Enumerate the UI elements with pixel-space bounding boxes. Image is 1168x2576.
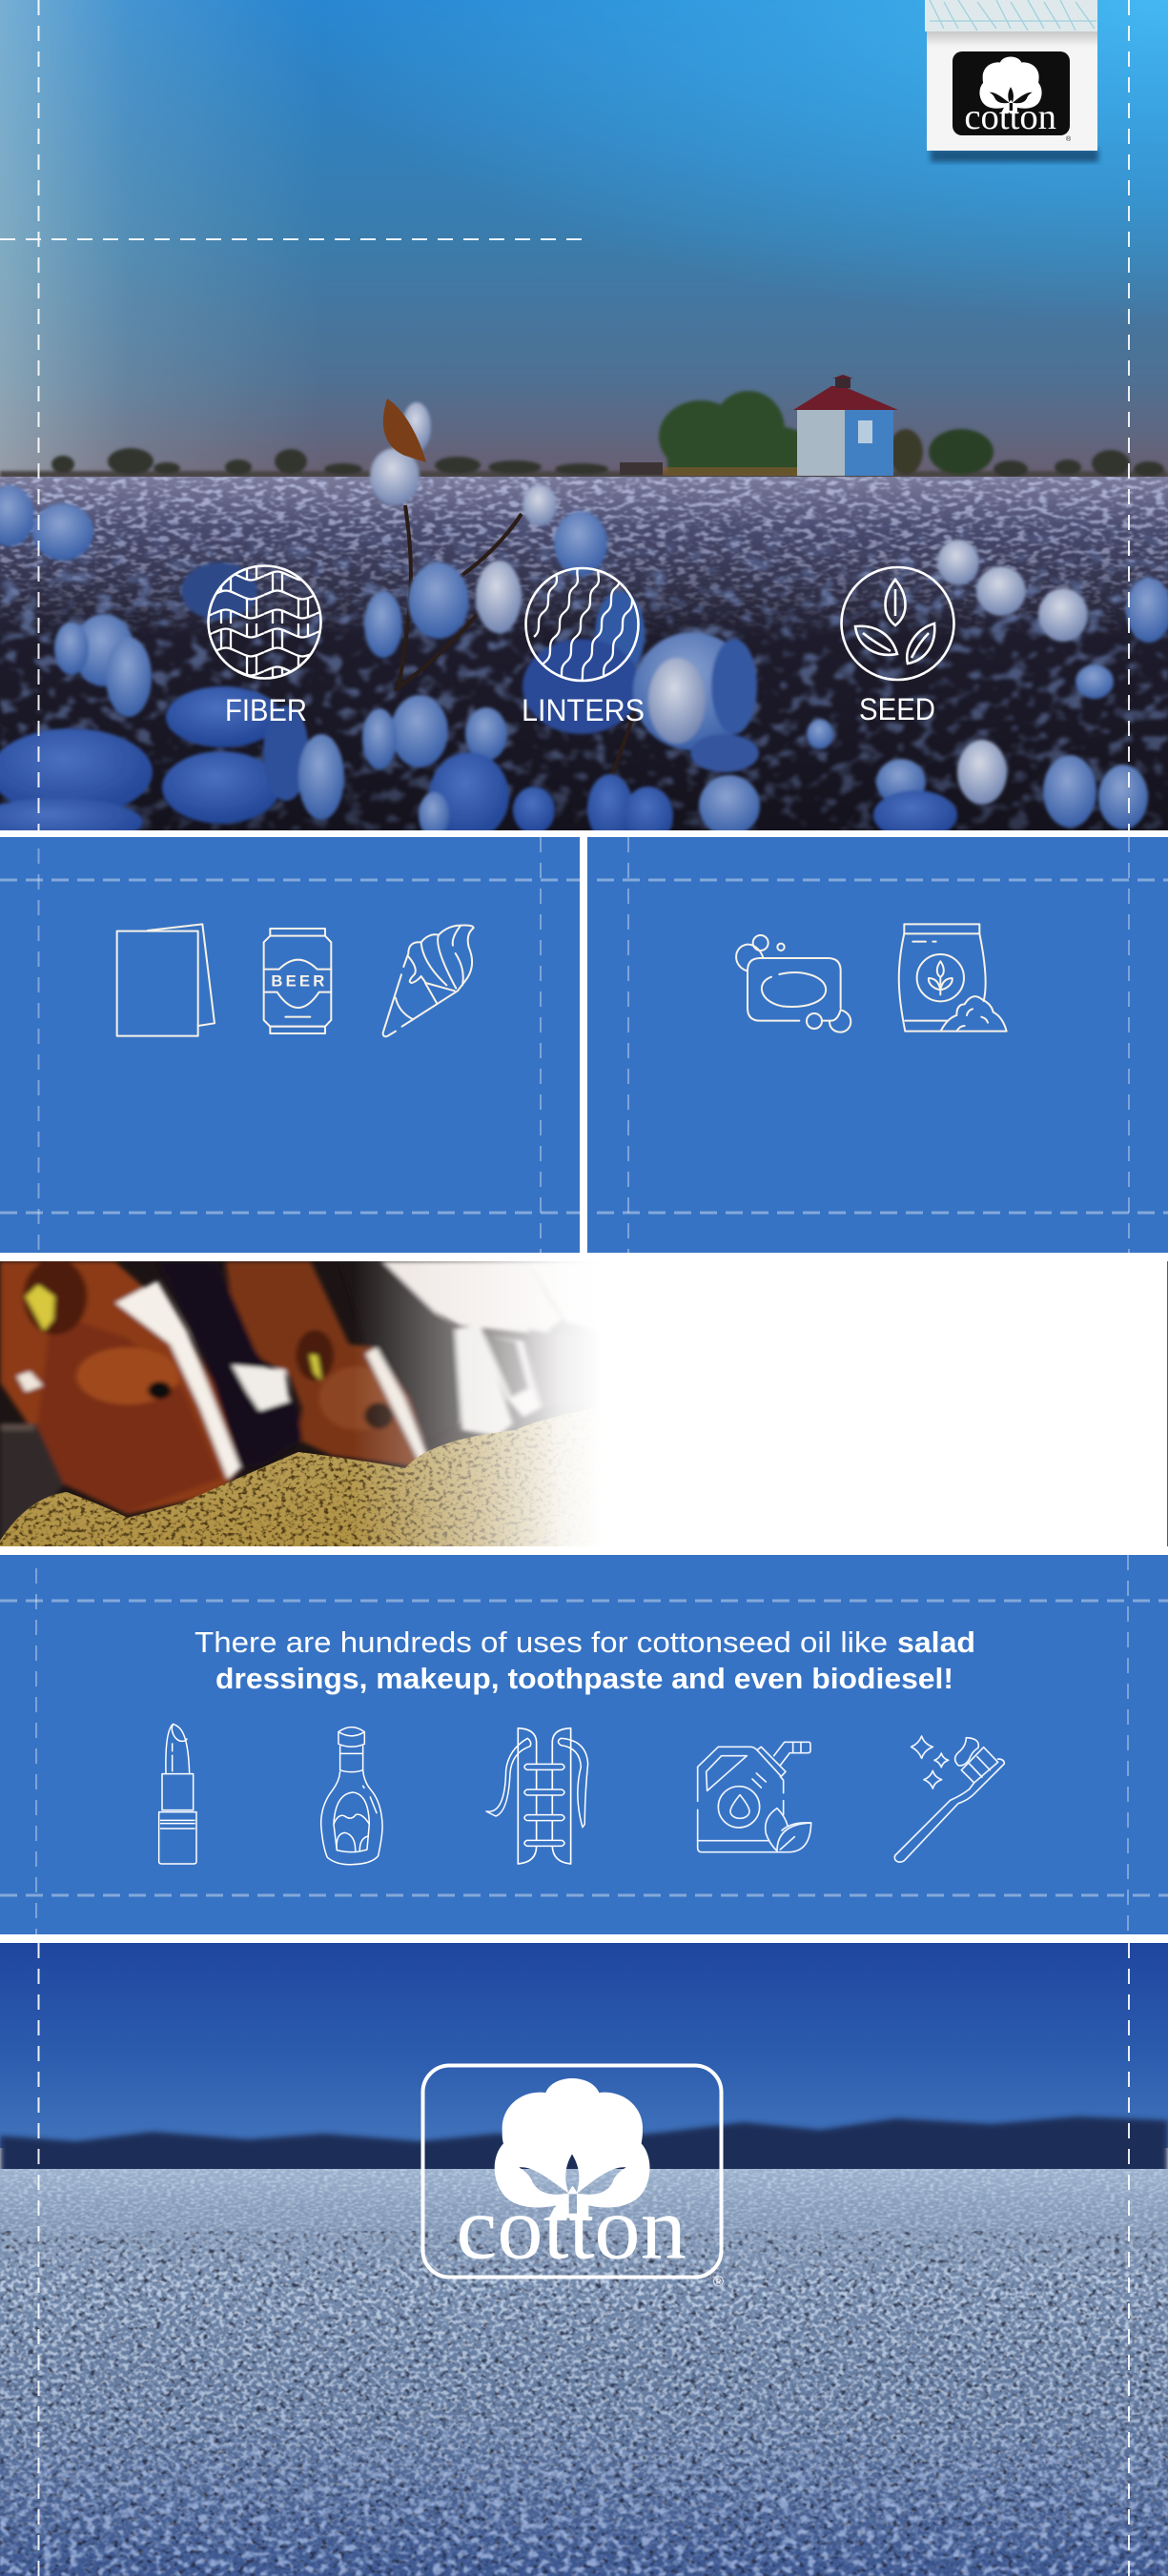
closing field: far speckle: [0, 2169, 1168, 2279]
icon: beer can: BEER: [271, 972, 324, 991]
closing field: near speckle: [0, 2364, 1168, 2576]
closing tree line: [0, 2116, 1168, 2178]
sewn cotton label tag: [925, 0, 1098, 162]
icon: fiber weave: [208, 566, 320, 679]
panel: closing cotton field photo: [0, 1943, 1168, 2576]
hay pile: [0, 1413, 576, 1546]
icon: ice cream cone: [383, 926, 474, 1036]
icon: lipstick: [159, 1724, 196, 1864]
tag registered mark: ®: [1066, 135, 1072, 143]
distant cotton rows: [0, 477, 1168, 639]
farmhouse and tree: [620, 375, 898, 476]
panel: hero cotton field photo: [0, 0, 1168, 846]
mid cotton blobs: [0, 515, 1168, 830]
text: cottonseed oil statement: [195, 1625, 975, 1695]
white fade: [353, 1261, 629, 1546]
logo frame: [423, 2065, 721, 2277]
dashed stitching on hero: [0, 0, 1129, 830]
tag logo background: [953, 51, 1070, 135]
tree line on the horizon: [0, 429, 1168, 479]
text: cottonseed oil statement: salad: [897, 1625, 975, 1659]
text: cottonseed oil statement: There are hundreds of uses for cottonseed oil like: [195, 1625, 888, 1659]
panel: linters and seed products: [587, 837, 1168, 1253]
logo registered mark: ®: [713, 2274, 724, 2290]
closing field: dark gaps between bolls: [0, 2231, 1168, 2576]
label: LINTERS: LINTERS: [522, 693, 645, 727]
label: SEED: SEED: [859, 692, 935, 726]
text: cottonseed oil statement: dressings, makeup, toothpaste and even biodiesel!: [215, 1662, 953, 1695]
sky: [0, 0, 1168, 477]
panel: fiber products: [0, 837, 580, 1258]
icon: seeds: [841, 567, 953, 680]
closing sky: [0, 1943, 1168, 2148]
tag logo: cotton: [964, 97, 1056, 137]
icon: feed bag: [899, 924, 1007, 1032]
cotton plant stems: [394, 505, 636, 775]
tag shadow: [931, 149, 1098, 162]
panel: cattle feed photo: [0, 1261, 584, 1546]
logo boll and wordmark: [456, 2078, 686, 2278]
foreground cotton bolls: [0, 402, 1168, 846]
panel: cottonseed oil uses: [0, 1555, 1168, 1934]
closing field: middle speckle: [0, 2202, 1168, 2576]
icon: shoe laces: [486, 1728, 588, 1864]
cotton boll husk leaf: [383, 399, 426, 462]
thin edge at right of cattle band: [1167, 1261, 1168, 1546]
closing field base: [0, 2169, 1168, 2576]
tag fabric: [927, 0, 1097, 151]
icon: linters waves: [524, 566, 640, 683]
logo boll and wordmark: cotton: [456, 2178, 686, 2278]
icon: soap bar: [736, 935, 850, 1032]
label: FIBER: FIBER: [225, 693, 307, 727]
cows: [0, 1258, 604, 1542]
icon: biodiesel jug: [698, 1742, 811, 1852]
icon: toothbrush: [894, 1736, 1004, 1862]
field base: [0, 477, 1168, 830]
icon: beer can: [264, 929, 331, 1033]
tag stitching: [930, 0, 1096, 31]
tag logo: [964, 56, 1056, 137]
dashed stitching on closing photo: [38, 1943, 1129, 2576]
icon: salad dressing bottle: [321, 1728, 382, 1865]
icon: folded paper: [117, 924, 215, 1036]
closing cotton logo: [423, 2065, 724, 2290]
